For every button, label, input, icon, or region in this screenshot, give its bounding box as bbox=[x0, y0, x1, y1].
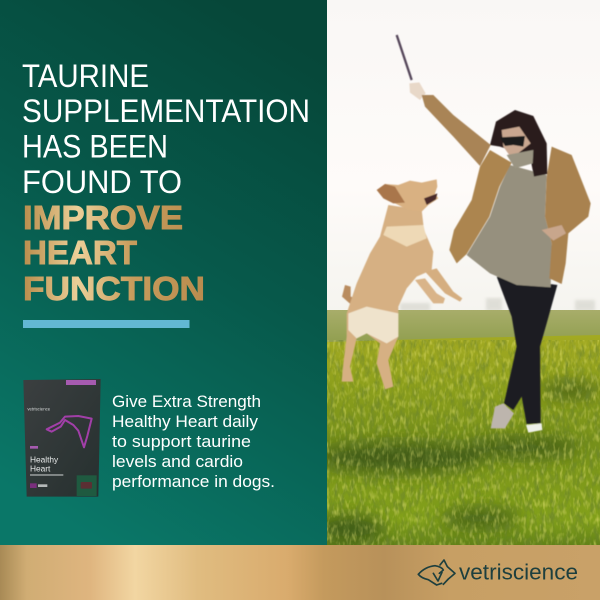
bag treat window bbox=[77, 475, 97, 496]
product bag bbox=[23, 379, 101, 497]
grass bbox=[327, 335, 600, 545]
bag title: Healthy bbox=[30, 455, 59, 465]
panel: green background bbox=[0, 0, 327, 545]
dog ear bbox=[377, 184, 405, 203]
divider bar bbox=[23, 320, 190, 328]
bag treats bbox=[81, 482, 92, 489]
photo: woman and dog in a field bbox=[315, 0, 600, 545]
heading: gold lines: IMPROVE bbox=[23, 199, 183, 236]
heading: gold lines: FUNCTION bbox=[23, 270, 205, 307]
heading: white lines: TAURINE bbox=[22, 58, 149, 94]
body text: levels and cardio bbox=[112, 452, 243, 471]
heading: gold lines bbox=[23, 199, 205, 307]
sky bbox=[327, 0, 600, 312]
sweater collar bbox=[507, 150, 533, 168]
logo wordmark: vetriscience bbox=[459, 560, 578, 584]
heading: white lines: FOUND TO bbox=[22, 164, 182, 200]
lower hand bbox=[542, 225, 566, 241]
grass light texture bbox=[327, 340, 600, 545]
body text bbox=[112, 392, 275, 491]
woman bbox=[409, 82, 591, 433]
left shoe bbox=[491, 403, 514, 428]
hand bbox=[409, 82, 426, 100]
jacket left side bbox=[449, 150, 512, 263]
vetriscience logo bbox=[418, 560, 578, 585]
bag badge bbox=[66, 380, 96, 385]
bag brand: vetriscience bbox=[27, 407, 51, 412]
heading: white lines: HAS BEEN bbox=[22, 128, 168, 164]
bag small icon bbox=[30, 483, 37, 488]
figures drawn in 3x coordinates bbox=[342, 35, 591, 433]
hill bbox=[327, 310, 600, 342]
bag body bbox=[23, 379, 101, 497]
dog tail bbox=[342, 285, 368, 308]
body text: Healthy Heart daily bbox=[112, 412, 259, 431]
right shoe bbox=[526, 423, 542, 433]
sweater bbox=[467, 165, 552, 287]
hair bbox=[490, 110, 547, 177]
raised sleeve bbox=[422, 95, 491, 166]
distant trees bbox=[400, 298, 595, 311]
leggings bbox=[497, 277, 557, 424]
grass dark texture bbox=[327, 340, 600, 545]
bag purple label bbox=[30, 446, 38, 449]
dog body bbox=[342, 205, 433, 389]
grass shadow patches bbox=[315, 382, 600, 542]
bag subtitle bbox=[30, 474, 63, 476]
dog chest highlight bbox=[383, 225, 427, 247]
dog mouth bbox=[424, 193, 437, 205]
bag small text bbox=[38, 484, 47, 487]
stick bbox=[397, 35, 412, 80]
dog bbox=[342, 179, 462, 389]
dog white rump bbox=[348, 307, 398, 343]
heading: gold lines: HEART bbox=[23, 234, 137, 271]
dog near front leg bbox=[425, 268, 462, 302]
footer gold band bbox=[0, 545, 600, 600]
dog head bbox=[385, 179, 439, 212]
bag dog outline bbox=[47, 416, 92, 447]
jacket right side bbox=[545, 147, 591, 284]
body text: performance in dogs. bbox=[112, 472, 275, 491]
heading: white lines bbox=[22, 58, 310, 200]
bag title line two: Heart bbox=[30, 463, 51, 473]
body text: Give Extra Strength bbox=[112, 392, 261, 411]
logo icon bbox=[418, 560, 455, 585]
face bbox=[502, 127, 531, 158]
sunglasses bbox=[500, 136, 525, 147]
body text: to support taurine bbox=[112, 432, 251, 451]
heading: white lines: SUPPLEMENTATION bbox=[22, 93, 310, 129]
dog far front leg bbox=[415, 278, 445, 303]
